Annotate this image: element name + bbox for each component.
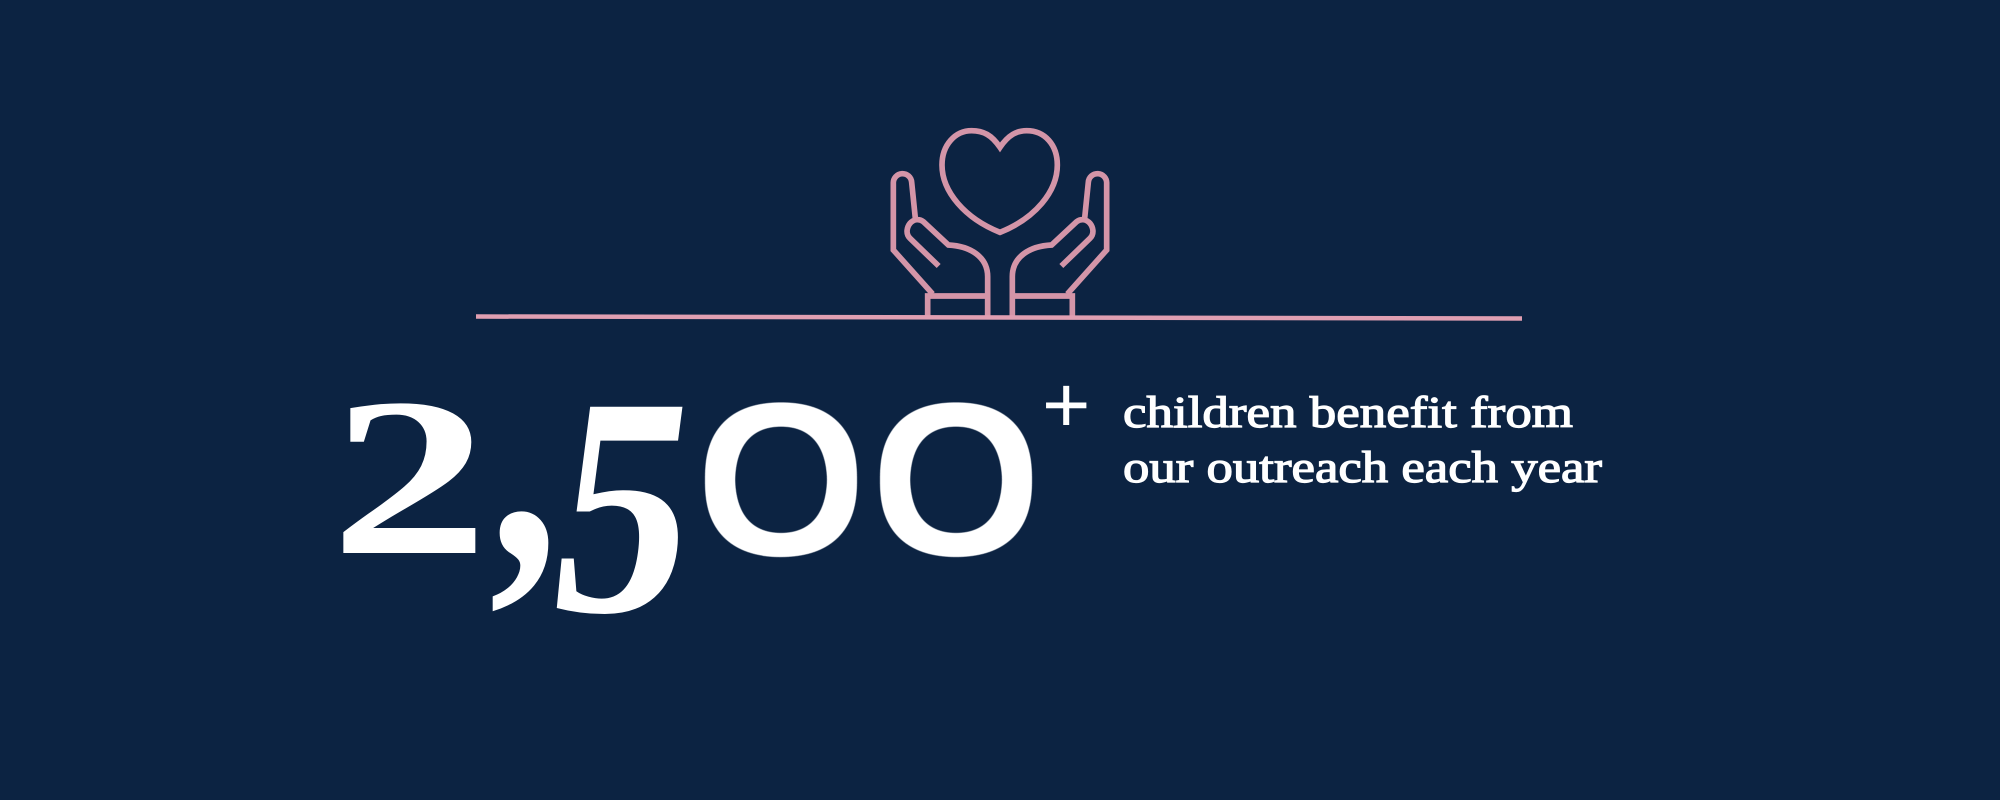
big number: 2,500: 0 <box>860 371 1052 596</box>
icon: hands holding heart <box>893 131 1107 317</box>
big number: 2,500: 5 <box>535 334 715 679</box>
big number: 2,500: , <box>489 266 559 632</box>
divider line <box>476 316 1522 318</box>
plus sign: + <box>1042 360 1090 450</box>
big number: 2,500 <box>330 266 1052 679</box>
big number: 2,500: 2 <box>330 351 489 602</box>
caption text: children benefit from <box>1123 388 1573 437</box>
caption text: our outreach each year <box>1123 443 1602 492</box>
big number: 2,500: 0 <box>685 371 877 596</box>
icon: right hand <box>1012 174 1107 317</box>
icon: left hand <box>893 174 988 317</box>
caption text <box>1123 388 1602 492</box>
icon: heart <box>942 131 1057 232</box>
